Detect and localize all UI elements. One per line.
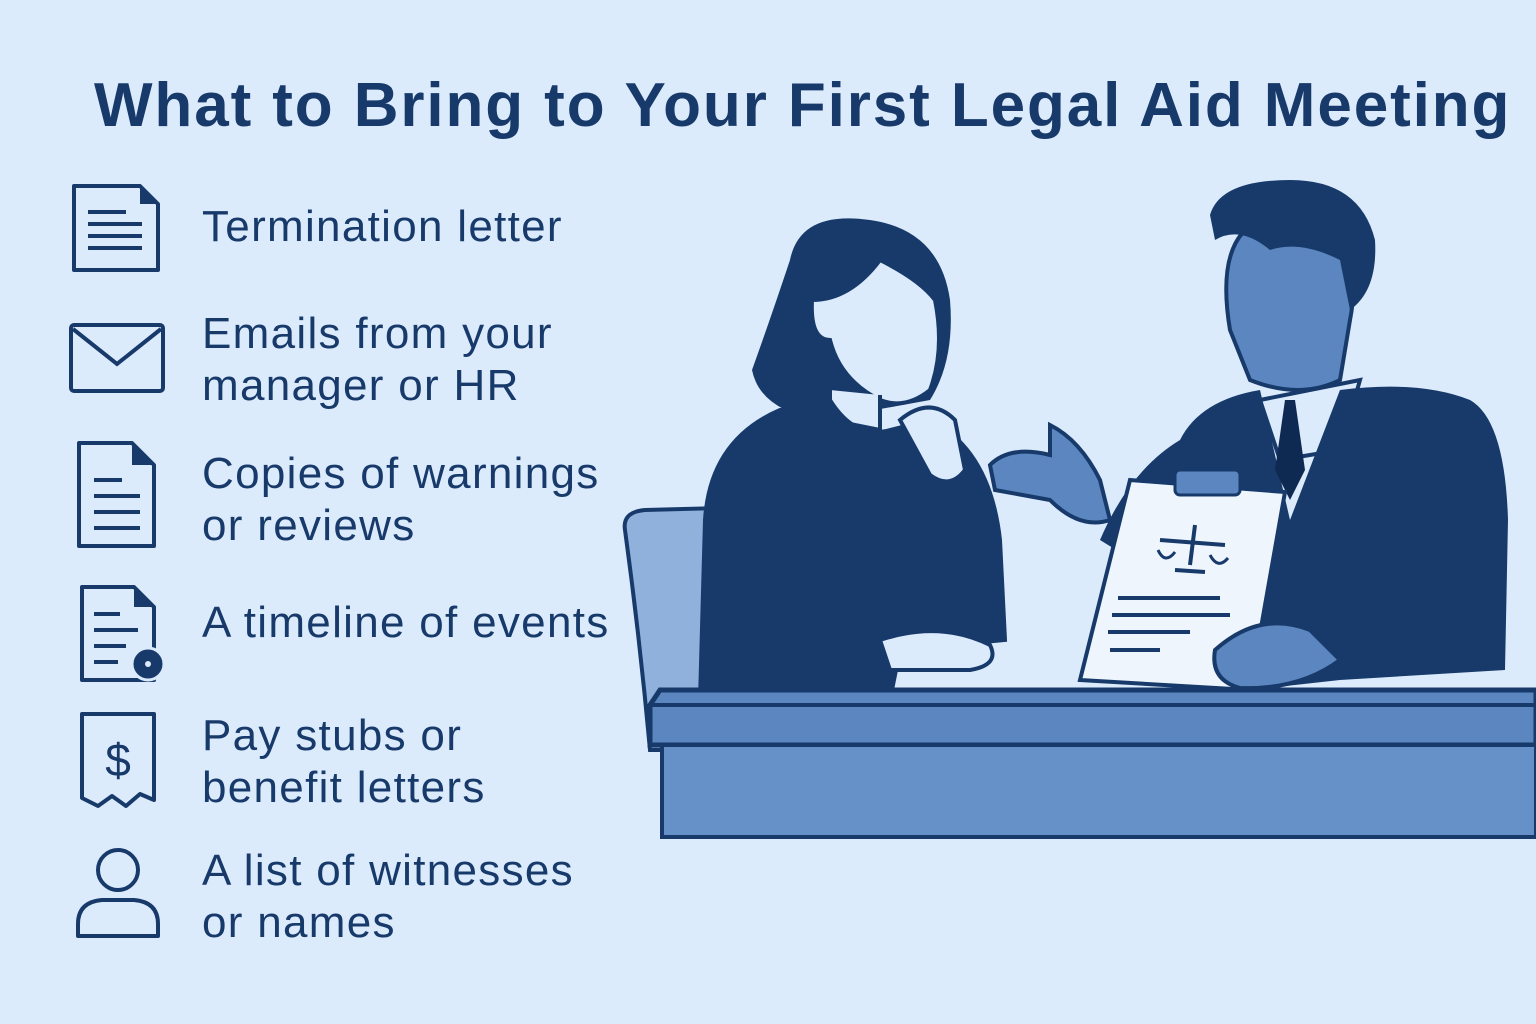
text: pay stubs: benefit letters bbox=[202, 763, 486, 812]
text: witnesses bbox=[202, 846, 574, 947]
text: timeline: A timeline of events bbox=[202, 598, 610, 647]
text: emails bbox=[202, 309, 553, 410]
icon: warnings document bbox=[77, 441, 156, 548]
text: termination letter: Termination letter bbox=[202, 202, 563, 251]
man bbox=[990, 180, 1508, 690]
illustration: meeting scene bbox=[622, 180, 1536, 839]
icon: envelope bbox=[69, 323, 165, 393]
chair bbox=[625, 508, 730, 750]
icon: pay stub: $ bbox=[105, 734, 131, 786]
text: warnings bbox=[202, 449, 600, 550]
text: warnings: or reviews bbox=[202, 501, 416, 550]
icon: person bbox=[76, 848, 160, 938]
text: witnesses: A list of witnesses bbox=[202, 846, 574, 895]
text: emails: manager or HR bbox=[202, 361, 520, 410]
clipboard with scales bbox=[1080, 470, 1340, 690]
icon: timeline document bbox=[80, 585, 162, 682]
icon: pay stub bbox=[80, 712, 156, 808]
text: emails: Emails from your bbox=[202, 309, 553, 358]
text: witnesses: or names bbox=[202, 898, 396, 947]
desk bbox=[650, 690, 1536, 837]
woman bbox=[700, 218, 1005, 700]
title: What to Bring to Your First Legal Aid Meeting bbox=[94, 71, 1511, 140]
icon: termination letter document bbox=[72, 184, 160, 272]
text: warnings: Copies of warnings bbox=[202, 449, 600, 498]
text: pay stubs: Pay stubs or bbox=[202, 711, 462, 760]
text: pay stubs bbox=[202, 711, 486, 812]
